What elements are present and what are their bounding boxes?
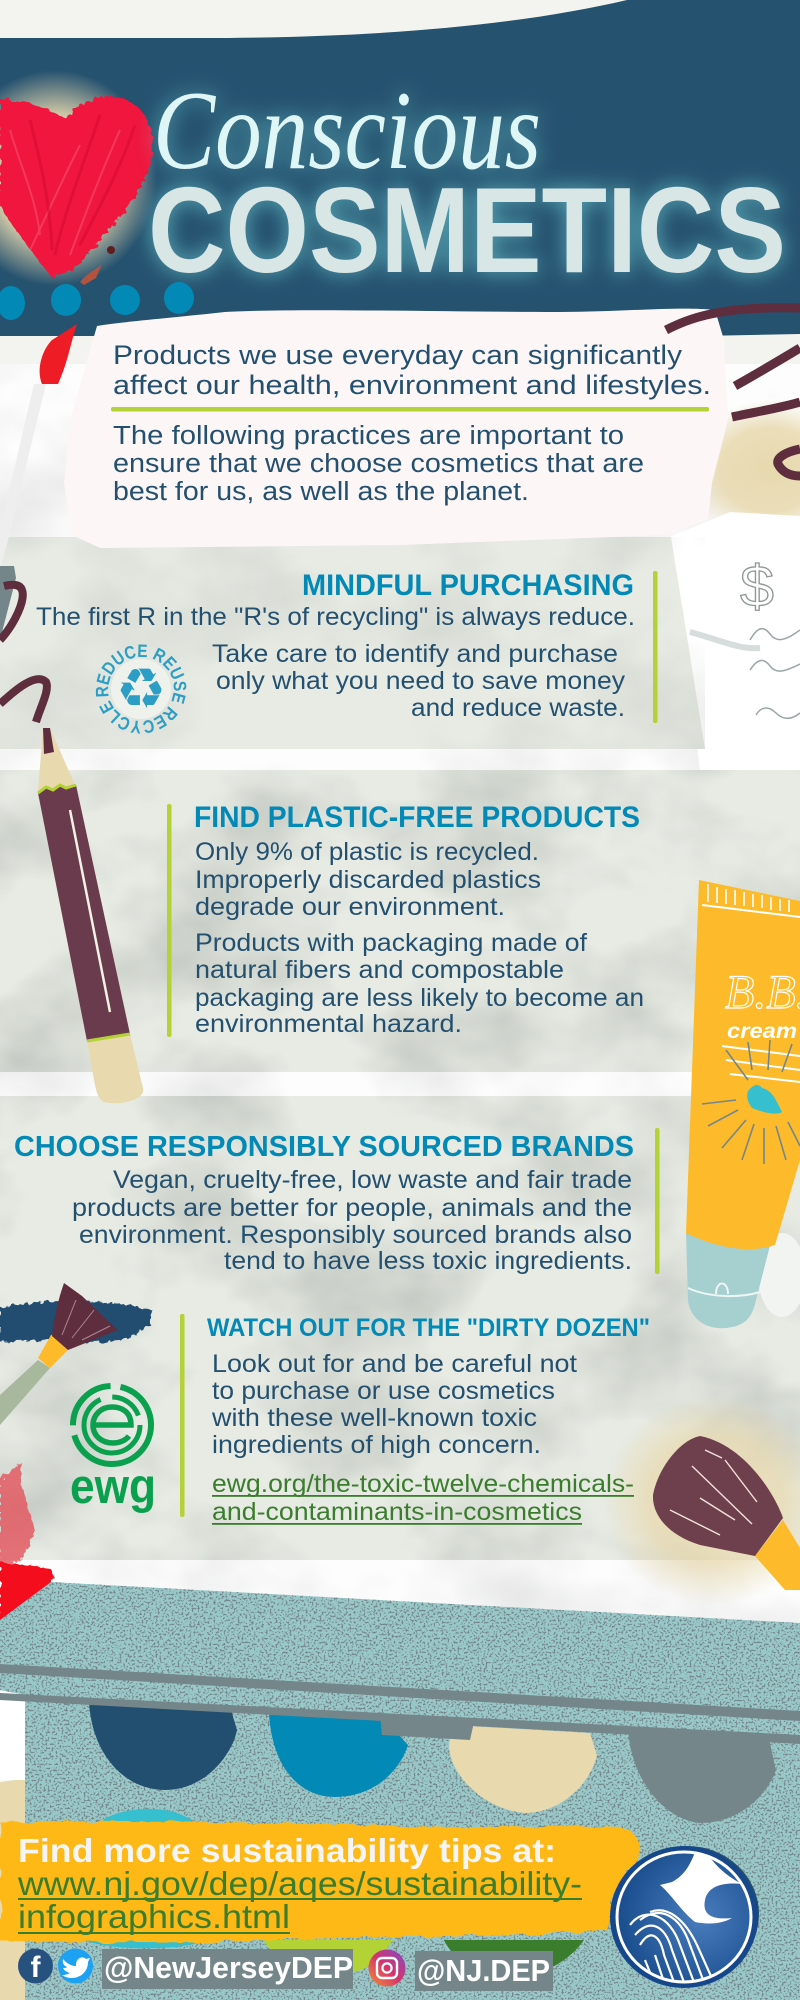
text: vegan (72, 1166, 632, 1275)
link: sustainability infographics: www.nj.gov/dep/aqes/sustainability- (17, 1865, 582, 1902)
illustration: red lipstick smear (0, 1462, 55, 1625)
heading: choose responsibly sourced brands: CHOOSE RESPONSIBLY SOURCED BRANDS (14, 1131, 634, 1163)
section: mindful purchasing (36, 569, 658, 734)
panel background: responsibly sourced and dirty dozen (0, 1096, 800, 1560)
text: vegan: Vegan, cruelty-free, low waste and fair trade (113, 1166, 632, 1194)
torn white paper, right (670, 512, 800, 770)
handle: NewJerseyDEP: @NewJerseyDEP (104, 1950, 353, 1985)
panel background: mindful purchasing (0, 537, 705, 749)
text: packaging: natural fibers and compostable (195, 956, 564, 984)
text: look out: to purchase or use cosmetics (212, 1377, 555, 1405)
text: find more tips: Find more sustainability tips at: (18, 1832, 556, 1869)
section: plastic-free (167, 801, 644, 1038)
beige corner, bottom-left (0, 1778, 30, 2000)
top paper strip (0, 0, 630, 38)
maroon scribbles, top right (666, 308, 800, 476)
text: plastic recycling (195, 838, 541, 921)
heading: watch out for the dirty dozen: WATCH OUT FOR THE "DIRTY DOZEN" (207, 1314, 650, 1342)
heading: find plastic-free products: FIND PLASTIC-FREE PRODUCTS (194, 801, 640, 834)
text: vegan: environment. Responsibly sourced brands also (79, 1221, 632, 1249)
text: packaging (195, 929, 644, 1038)
illustration: fan brush (0, 1283, 152, 1425)
icon: reduce reuse recycle: REDUCE REUSE RECYCLE (96, 644, 186, 734)
link: ewg: ewg.org/the-toxic-twelve-chemicals- (212, 1470, 634, 1498)
logo: ewg: ewg (70, 1460, 156, 1514)
link: sustainability infographics: infographics.html (18, 1898, 290, 1935)
text: look out: with these well-known toxic (211, 1404, 537, 1432)
section: dirty dozen (70, 1314, 650, 1526)
illustration: eyeshadow palette (0, 1580, 800, 2000)
intro text: affect our health, environment and lifestyles. (113, 370, 711, 400)
accent bar (655, 1128, 660, 1274)
title: Conscious: Conscious (153, 69, 541, 193)
pale strip under header band (0, 330, 800, 364)
illustration: money doodles (690, 554, 800, 718)
text: plastic recycling: degrade our environment. (195, 893, 505, 921)
text: take care: and reduce waste. (411, 694, 625, 722)
decorative paint dots (0, 282, 194, 320)
illustration: money doodles: $ (740, 554, 774, 619)
text: look out: Look out for and be careful not (212, 1350, 577, 1378)
text: take care (212, 640, 626, 722)
accent bar (653, 571, 658, 723)
text: look out: ingredients of high concern. (212, 1431, 541, 1459)
text: vegan: tend to have less toxic ingredients. (224, 1247, 632, 1275)
icon: twitter (58, 1948, 93, 1984)
social handles (18, 1948, 553, 1991)
text: packaging: packaging are less likely to become an (195, 984, 644, 1012)
palette hinge (0, 1664, 800, 1744)
heading: mindful purchasing: MINDFUL PURCHASING (302, 569, 634, 602)
maroon scribbles, left (0, 585, 47, 722)
illustration: BB cream tube (686, 880, 800, 1328)
palette wells (85, 1702, 776, 1975)
illustration: heart with glow (0, 70, 157, 286)
handle: NJ.DEP: @NJ.DEP (417, 1953, 550, 1988)
link: sustainability infographics (17, 1865, 582, 1935)
footer banner (0, 1821, 639, 1943)
text: take care: Take care to identify and purchase (212, 640, 618, 668)
panel background: plastic-free (0, 770, 800, 1072)
link: ewg (212, 1470, 634, 1526)
illustration: BB cream tube: cream (727, 1020, 797, 1043)
logo: ewg (70, 1386, 156, 1514)
accent bar (167, 804, 172, 1037)
text: first R: The first R in the "R's of recycling" is always reduce. (36, 603, 635, 631)
white patch, left of palette (0, 1692, 26, 1780)
text: plastic recycling: Improperly discarded plastics (195, 866, 541, 894)
header band (0, 0, 800, 336)
section: responsibly sourced (14, 1128, 660, 1275)
accent bar (180, 1314, 184, 1517)
icon: facebook: f (30, 1951, 42, 1984)
illustration: pencil (38, 728, 143, 1103)
text: plastic recycling: Only 9% of plastic is recycled. (195, 838, 539, 866)
illustration: powder brush with glow (603, 1395, 800, 1605)
beige glow behind intro, right side (685, 400, 800, 540)
intro text: The following practices are important to (113, 422, 624, 450)
intro note panel (64, 309, 728, 548)
intro text (111, 340, 711, 506)
text: packaging: Products with packaging made of (195, 929, 587, 957)
intro text: ensure that we choose cosmetics that are (113, 450, 644, 478)
text: take care: only what you need to save money (216, 667, 626, 695)
text: packaging: environmental hazard. (195, 1010, 462, 1038)
icon: facebook (18, 1948, 53, 1984)
icon: reduce reuse recycle: ♻ (116, 657, 166, 722)
intro text: best for us, as well as the planet. (113, 478, 529, 506)
illustration: lip brush (0, 324, 77, 640)
text: vegan: products are better for people, animals and the (72, 1194, 632, 1222)
logo: NJDEP seal (610, 1846, 759, 1988)
link: ewg: and-contaminants-in-cosmetics (212, 1498, 582, 1526)
text: look out (211, 1350, 577, 1459)
intro text: Products we use everyday can significantly (113, 340, 683, 370)
icon: instagram (368, 1950, 406, 1986)
